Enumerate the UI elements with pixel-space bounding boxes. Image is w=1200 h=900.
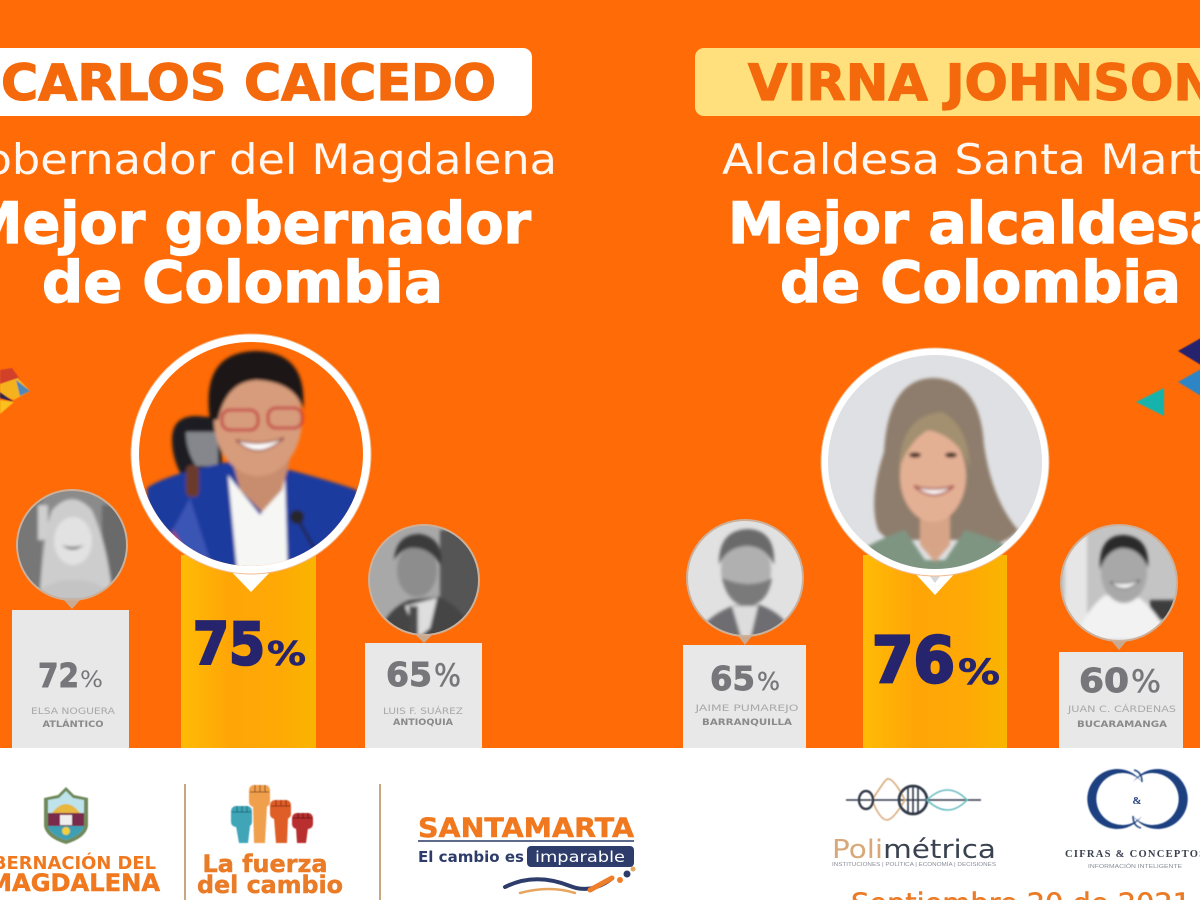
bar: Luis F. Suárez 65% [365,643,482,748]
bar: Carlos Caicedo 75% [181,555,316,748]
logo: Polimétrica: INSTITUCIONES | POLÍTICA | ECONOMÍA | DECISIONES [832,861,996,868]
headline: Mejor gobernador de Colombia: de Colombia [42,250,443,316]
logo: Santa Marta: imparable [535,848,625,866]
bar: Jaime Pumarejo 65%: JAIME PUMAREJO [694,704,798,714]
portrait pin: Carlos Caicedo [131,334,371,592]
bar: Luis F. Suárez 65%: % [434,658,461,694]
footer band [0,748,1200,900]
logo: Cifras & Conceptos: INFORMACIÓN INTELIGENTE [1088,863,1182,870]
name banner: Virna Johnson: VIRNA JOHNSON [748,54,1200,112]
logo: La fuerza del cambio: La fuerza [202,850,328,878]
bar: Jaime Pumarejo 65%: % [757,667,780,696]
icon: wave mark [846,779,981,820]
portrait pin: Juan C. Cárdenas [1060,524,1180,650]
logo: Polimétrica [832,779,996,868]
bar: Elsa Noguera 72% [12,610,129,748]
portrait pin: Virna Johnson [821,348,1049,595]
icon: coat of arms [44,787,88,844]
bar: Juan C. Cárdenas 60%: % [1131,664,1161,700]
bar: Virna Johnson 76%: % [958,653,1000,693]
bar: Carlos Caicedo 75%: % [267,634,306,673]
bar: Luis F. Suárez 65%: ANTIOQUIA [393,718,453,728]
headline: Mejor alcaldesa de Colombia [728,191,1200,316]
logo: Santa Marta [418,813,635,893]
icon: swoosh [505,867,635,893]
bar: Juan C. Cárdenas 60%: BUCARAMANGA [1077,720,1167,730]
logo: Gobernación del Magdalena [0,787,160,897]
bar: Elsa Noguera 72%: % [80,668,103,693]
bar: Jaime Pumarejo 65% [683,645,806,748]
bar: Luis F. Suárez 65%: 65 [386,655,432,694]
role: Alcaldesa Santa Marta: Alcaldesa Santa Marta [722,135,1200,184]
bar: Jaime Pumarejo 65%: BARRANQUILLA [702,718,792,728]
panel: Carlos Caicedo header [0,48,557,316]
headline: Mejor gobernador de Colombia [0,191,531,316]
headline: Mejor alcaldesa de Colombia: de Colombia [780,250,1181,316]
logo: Santa Marta: SANTAMARTA [418,813,634,844]
logo: Santa Marta: El cambio es [418,848,524,866]
divider lines [185,784,380,900]
icon: raised fists [231,785,313,843]
panel: Virna Johnson header [695,48,1200,316]
bar: Juan C. Cárdenas 60%: JUAN C. CÁRDENAS [1067,703,1176,715]
logo: La fuerza del cambio: del cambio [197,871,343,899]
bar: Elsa Noguera 72%: 72 [38,656,79,695]
portrait pin: Luis F. Suárez [368,524,485,643]
bar: Luis F. Suárez 65%: LUIS F. SUÁREZ [383,705,463,717]
bar: Juan C. Cárdenas 60% [1059,652,1183,748]
bar: Elsa Noguera 72%: ATLÁNTICO [42,718,104,730]
portrait pin: Elsa Noguera [16,489,128,609]
bar: Elsa Noguera 72%: ELSA NOGUERA [31,707,116,717]
name banner: Carlos Caicedo: CARLOS CAICEDO [1,54,496,112]
icon: C&C monogram [1087,769,1188,829]
logo: Polimétrica: Polimétrica [832,835,996,865]
logo: La fuerza del cambio [197,785,343,899]
bar: Juan C. Cárdenas 60%: 60 [1079,661,1129,700]
bar: Jaime Pumarejo 65%: 65 [710,659,755,698]
logo: Cifras & Conceptos [1065,769,1200,870]
icon: right decorative shards [1136,338,1200,416]
bar: Virna Johnson 76%: 76 [872,624,955,697]
bar: Carlos Caicedo 75%: 75 [193,610,265,678]
icon: left decorative shards [0,368,30,414]
portrait pin: Jaime Pumarejo [686,519,804,645]
logo: Cifras & Conceptos: & [1132,795,1142,807]
bar: Virna Johnson 76% [863,555,1007,748]
